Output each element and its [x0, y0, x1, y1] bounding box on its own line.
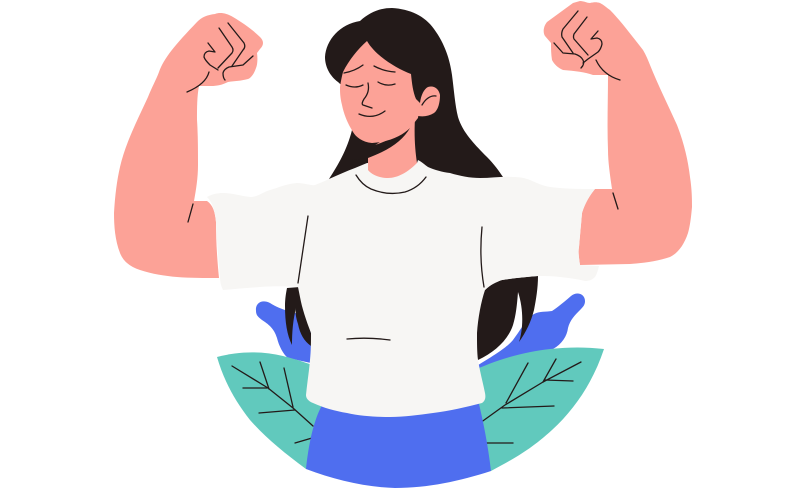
hair: long back hair	[325, 8, 503, 190]
shirt fold lines	[298, 216, 484, 340]
eyebrows	[344, 65, 395, 73]
icon: blue background leaf right	[470, 294, 585, 370]
ear line	[422, 96, 436, 105]
right arm with fist	[544, 1, 692, 265]
leaf veins left	[232, 362, 313, 443]
shirt collar line	[356, 175, 426, 193]
fist and elbow lines left	[187, 23, 253, 222]
hair: lower left lock	[285, 287, 315, 350]
nose	[362, 83, 372, 108]
smile	[359, 111, 385, 116]
neck	[368, 118, 417, 178]
leaf veins right	[480, 359, 581, 443]
skirt	[306, 398, 491, 488]
hair: lower right lock	[465, 276, 538, 360]
hair: neck shadow	[352, 128, 410, 160]
closed eyes	[346, 82, 395, 87]
fist and elbow lines right	[554, 11, 620, 209]
icon: teal leaf right	[470, 348, 604, 471]
icon: blue background leaf left	[256, 301, 320, 365]
left arm with fist	[114, 13, 263, 278]
icon: teal leaf left	[217, 352, 325, 469]
ear	[414, 86, 440, 116]
face	[340, 41, 420, 143]
white t-shirt	[207, 160, 599, 417]
